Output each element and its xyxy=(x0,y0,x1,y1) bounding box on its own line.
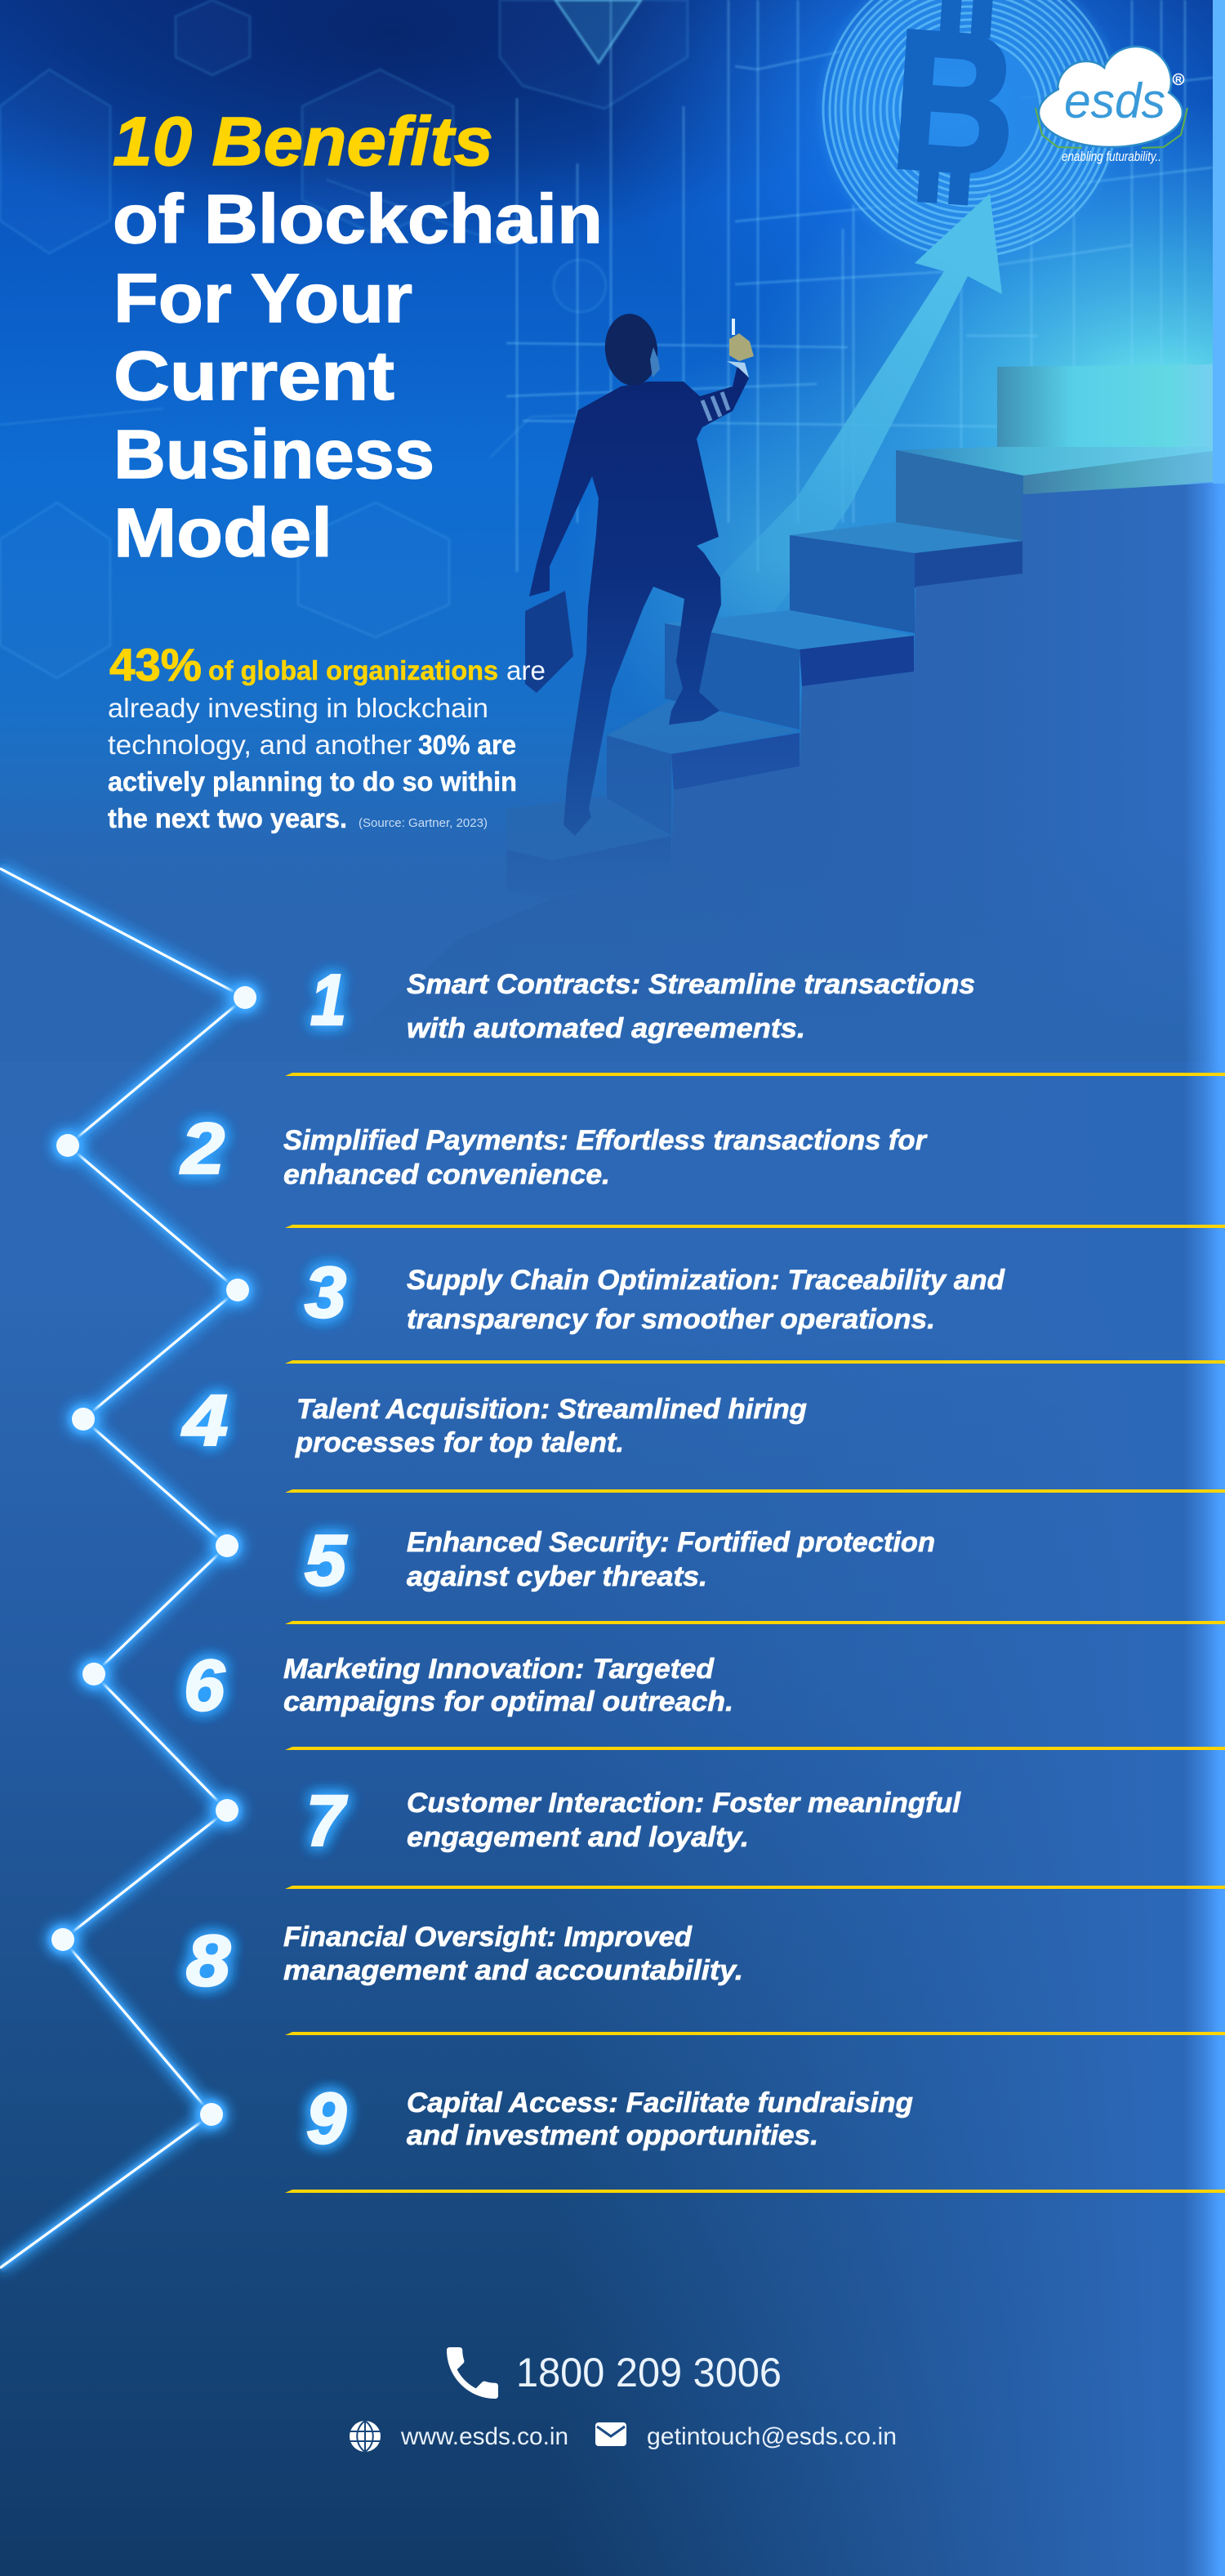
intro statistic text: of global organizations xyxy=(208,655,498,685)
scene fade into lower panel xyxy=(506,777,671,899)
item 1: with automated agreements. xyxy=(407,1013,805,1044)
intro statistic text: 30% are xyxy=(418,730,516,760)
logo: esds xyxy=(1036,47,1187,164)
item 7: Customer Interaction: Foster meaningful xyxy=(407,1788,962,1819)
timeline nodes xyxy=(49,984,259,2128)
staircase xyxy=(506,364,1213,899)
hands xyxy=(1036,108,1187,148)
intro statistic text: technology, and another xyxy=(108,730,412,760)
item 2: Simplified Payments: Effortless transactions for xyxy=(283,1125,928,1156)
lower fade over stair silhouette xyxy=(0,833,1225,1062)
icon: bitcoin coin xyxy=(822,0,1114,255)
grid lines xyxy=(0,0,1213,572)
item 4: processes for top talent. xyxy=(295,1427,624,1458)
title: Business xyxy=(114,416,434,493)
item 9 xyxy=(285,2078,1225,2193)
intro statistic text xyxy=(108,639,546,833)
item 1 xyxy=(285,959,1225,1076)
intro statistic text: 43% xyxy=(109,639,202,690)
item 7: 7 xyxy=(306,1780,348,1861)
hexagon network shapes xyxy=(0,0,688,678)
item 6 xyxy=(184,1645,1225,1750)
body xyxy=(529,365,749,836)
icon: globe xyxy=(350,2421,381,2452)
footer contact xyxy=(350,2347,897,2452)
briefcase xyxy=(525,591,573,693)
title: 10 Benefits xyxy=(113,103,493,180)
item 8: management and accountability. xyxy=(283,1955,743,1986)
title: of Blockchain xyxy=(113,181,603,257)
item 6: Marketing Innovation: Targeted xyxy=(283,1654,715,1685)
foreground stair silhouette xyxy=(327,483,1213,1062)
item 7: engagement and loyalty. xyxy=(407,1822,749,1853)
icon: phone xyxy=(447,2347,498,2399)
website: www.esds.co.in xyxy=(400,2423,568,2450)
head xyxy=(604,314,658,386)
item 9: 9 xyxy=(306,2078,346,2159)
item 7 xyxy=(285,1780,1225,1889)
item 8: Financial Oversight: Improved xyxy=(283,1922,693,1953)
arrow rising to the coin xyxy=(739,194,1002,559)
item 6: 6 xyxy=(184,1645,225,1726)
title: Model xyxy=(114,494,332,571)
email: getintouch@esds.co.in xyxy=(647,2423,897,2450)
item 9: Capital Access: Facilitate fundraising xyxy=(407,2087,913,2118)
item 5 xyxy=(285,1520,1225,1624)
item 9: and investment opportunities. xyxy=(407,2120,818,2151)
intro statistic text: already investing in blockchain xyxy=(108,693,488,723)
item 3: Supply Chain Optimization: Traceability and xyxy=(407,1265,1005,1296)
businessman silhouette xyxy=(525,311,754,836)
icon: mail xyxy=(595,2422,626,2446)
title: For Your xyxy=(114,260,412,337)
logo: esds: esds xyxy=(1064,74,1165,128)
item 2 xyxy=(180,1108,1225,1228)
panel: hero scene xyxy=(0,0,1213,850)
item 1: 1 xyxy=(310,959,346,1040)
item 6: campaigns for optimal outreach. xyxy=(283,1686,733,1717)
phone number: 1800 209 3006 xyxy=(516,2350,782,2395)
item 2: enhanced convenience. xyxy=(283,1159,610,1190)
zigzag glowing timeline xyxy=(0,868,259,2268)
cloud xyxy=(1039,47,1183,147)
item 5: Enhanced Security: Fortified protection xyxy=(407,1527,935,1558)
logo: esds: enabling futurability.. xyxy=(1062,149,1161,164)
intro statistic text: the next two years. xyxy=(108,803,347,833)
item 3: transparency for smoother operations. xyxy=(407,1304,935,1335)
sleeve highlights xyxy=(702,392,728,421)
title xyxy=(113,103,603,571)
item 5: against cyber threats. xyxy=(407,1561,707,1592)
item 3: 3 xyxy=(305,1252,346,1333)
title: Current xyxy=(114,337,394,414)
item 8: 8 xyxy=(186,1920,230,2001)
hand and pen xyxy=(729,333,754,361)
item 4: Talent Acquisition: Streamlined hiring xyxy=(296,1394,807,1425)
item 1: Smart Contracts: Streamline transactions xyxy=(407,969,975,1000)
item 4 xyxy=(181,1380,1225,1493)
item 5: 5 xyxy=(305,1520,347,1601)
item 4: 4 xyxy=(181,1380,228,1461)
logo: esds: R xyxy=(1175,75,1182,85)
item 2: 2 xyxy=(180,1108,225,1189)
item 3 xyxy=(285,1252,1225,1364)
item 8 xyxy=(186,1920,1225,2035)
intro statistic text: are xyxy=(506,655,546,685)
intro statistic text: actively planning to do so within xyxy=(108,766,517,797)
right edge highlight xyxy=(1184,0,1225,2576)
intro statistic text: (Source: Gartner, 2023) xyxy=(359,816,488,830)
